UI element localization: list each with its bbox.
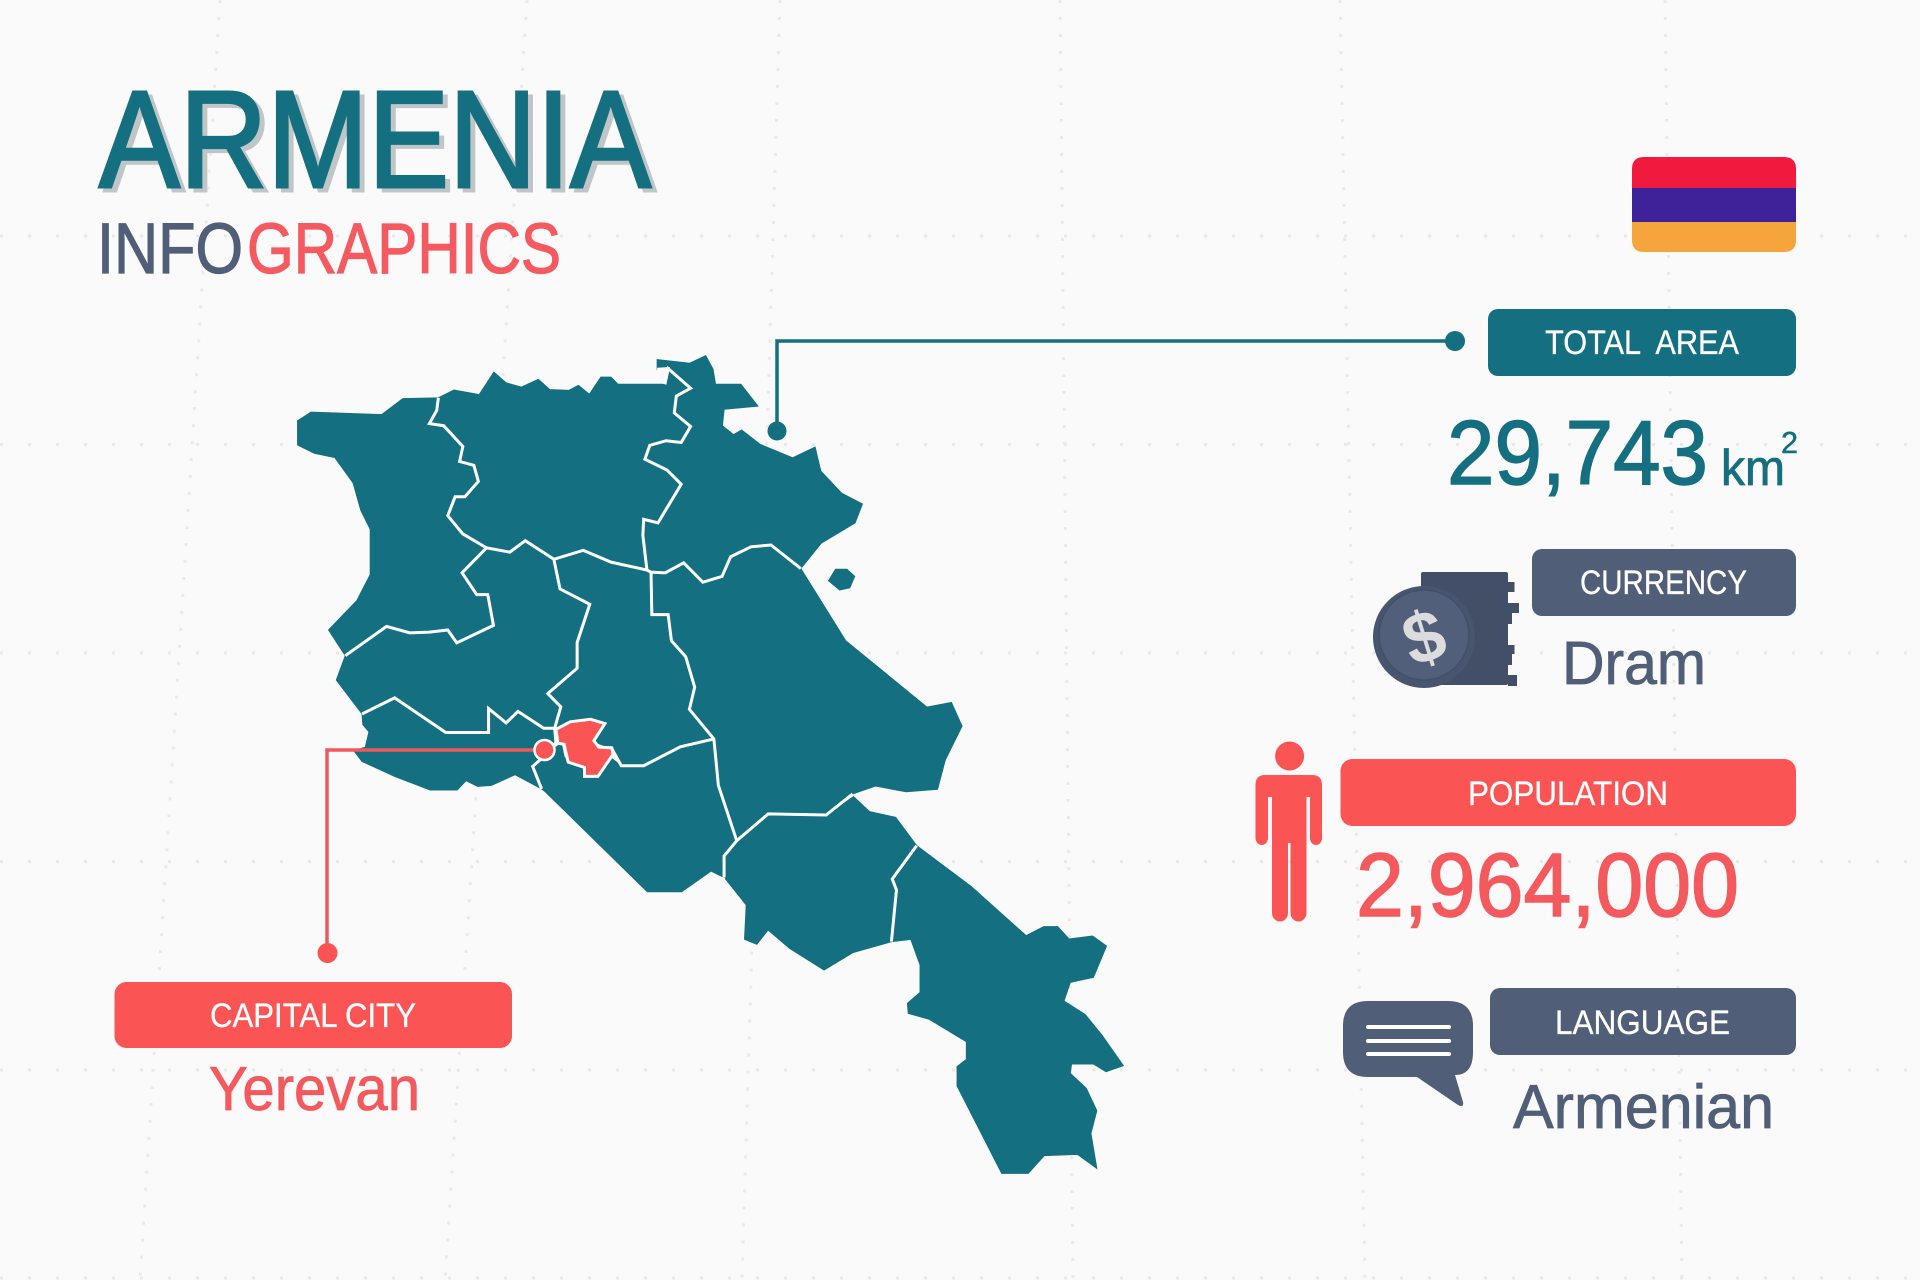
internal province borders [345,369,853,877]
label: capital city: CAPITAL CITY [210,997,416,1035]
value: total area: km [1721,440,1785,496]
region: Ararat [533,739,737,892]
region: Tavush [643,356,862,582]
region: Lori [429,369,691,570]
label: total area [1488,309,1796,376]
icon: coins: $ [1393,594,1455,682]
subtitle: INFOGRAPHICS: INFO [97,210,243,289]
value: total area: 29,743 [1447,403,1708,504]
subtitle: INFOGRAPHICS: GRAPHICS [247,210,561,289]
value: total area: 2 [1781,425,1798,460]
value: population: 2,964,000 [1356,836,1739,936]
border: Vayots Dzor and Syunik [891,846,917,942]
icon: coins [1373,572,1519,688]
connector: total area [768,331,1465,440]
connector: capital city [318,740,554,963]
subtitle: INFOGRAPHICS [97,210,561,289]
flag of Armenia [1632,157,1796,252]
label: language: LANGUAGE [1555,1004,1730,1042]
label: currency: CURRENCY [1580,564,1747,602]
region: Kotayk [548,550,714,766]
region: Shirak [298,398,493,656]
region: Gegharkunik [651,545,962,840]
value: capital city: Yerevan [209,1055,420,1124]
island: Artsvashen [829,569,855,590]
title: ARMENIA: ARMENIA [104,67,656,221]
icon: speech bubble [1343,1001,1473,1106]
title: ARMENIA: ARMENIA [99,63,651,217]
label: language [1490,988,1796,1055]
region: Armavir [354,698,556,790]
value: language: Armenian [1513,1073,1774,1142]
label: currency [1532,549,1796,616]
region: Yerevan [556,719,613,776]
label: capital city [114,982,512,1048]
label: total area: TOTAL AREA [1545,324,1739,362]
map of Armenia [298,356,1123,1173]
icon: person [1256,742,1322,922]
label: population [1340,759,1796,826]
value: currency: Dram [1562,629,1706,697]
region: Syunik [891,846,1123,1173]
region: Vayots Dzor [723,797,917,970]
label: population: POPULATION [1468,775,1668,813]
region: Aragatsotn [336,541,590,732]
